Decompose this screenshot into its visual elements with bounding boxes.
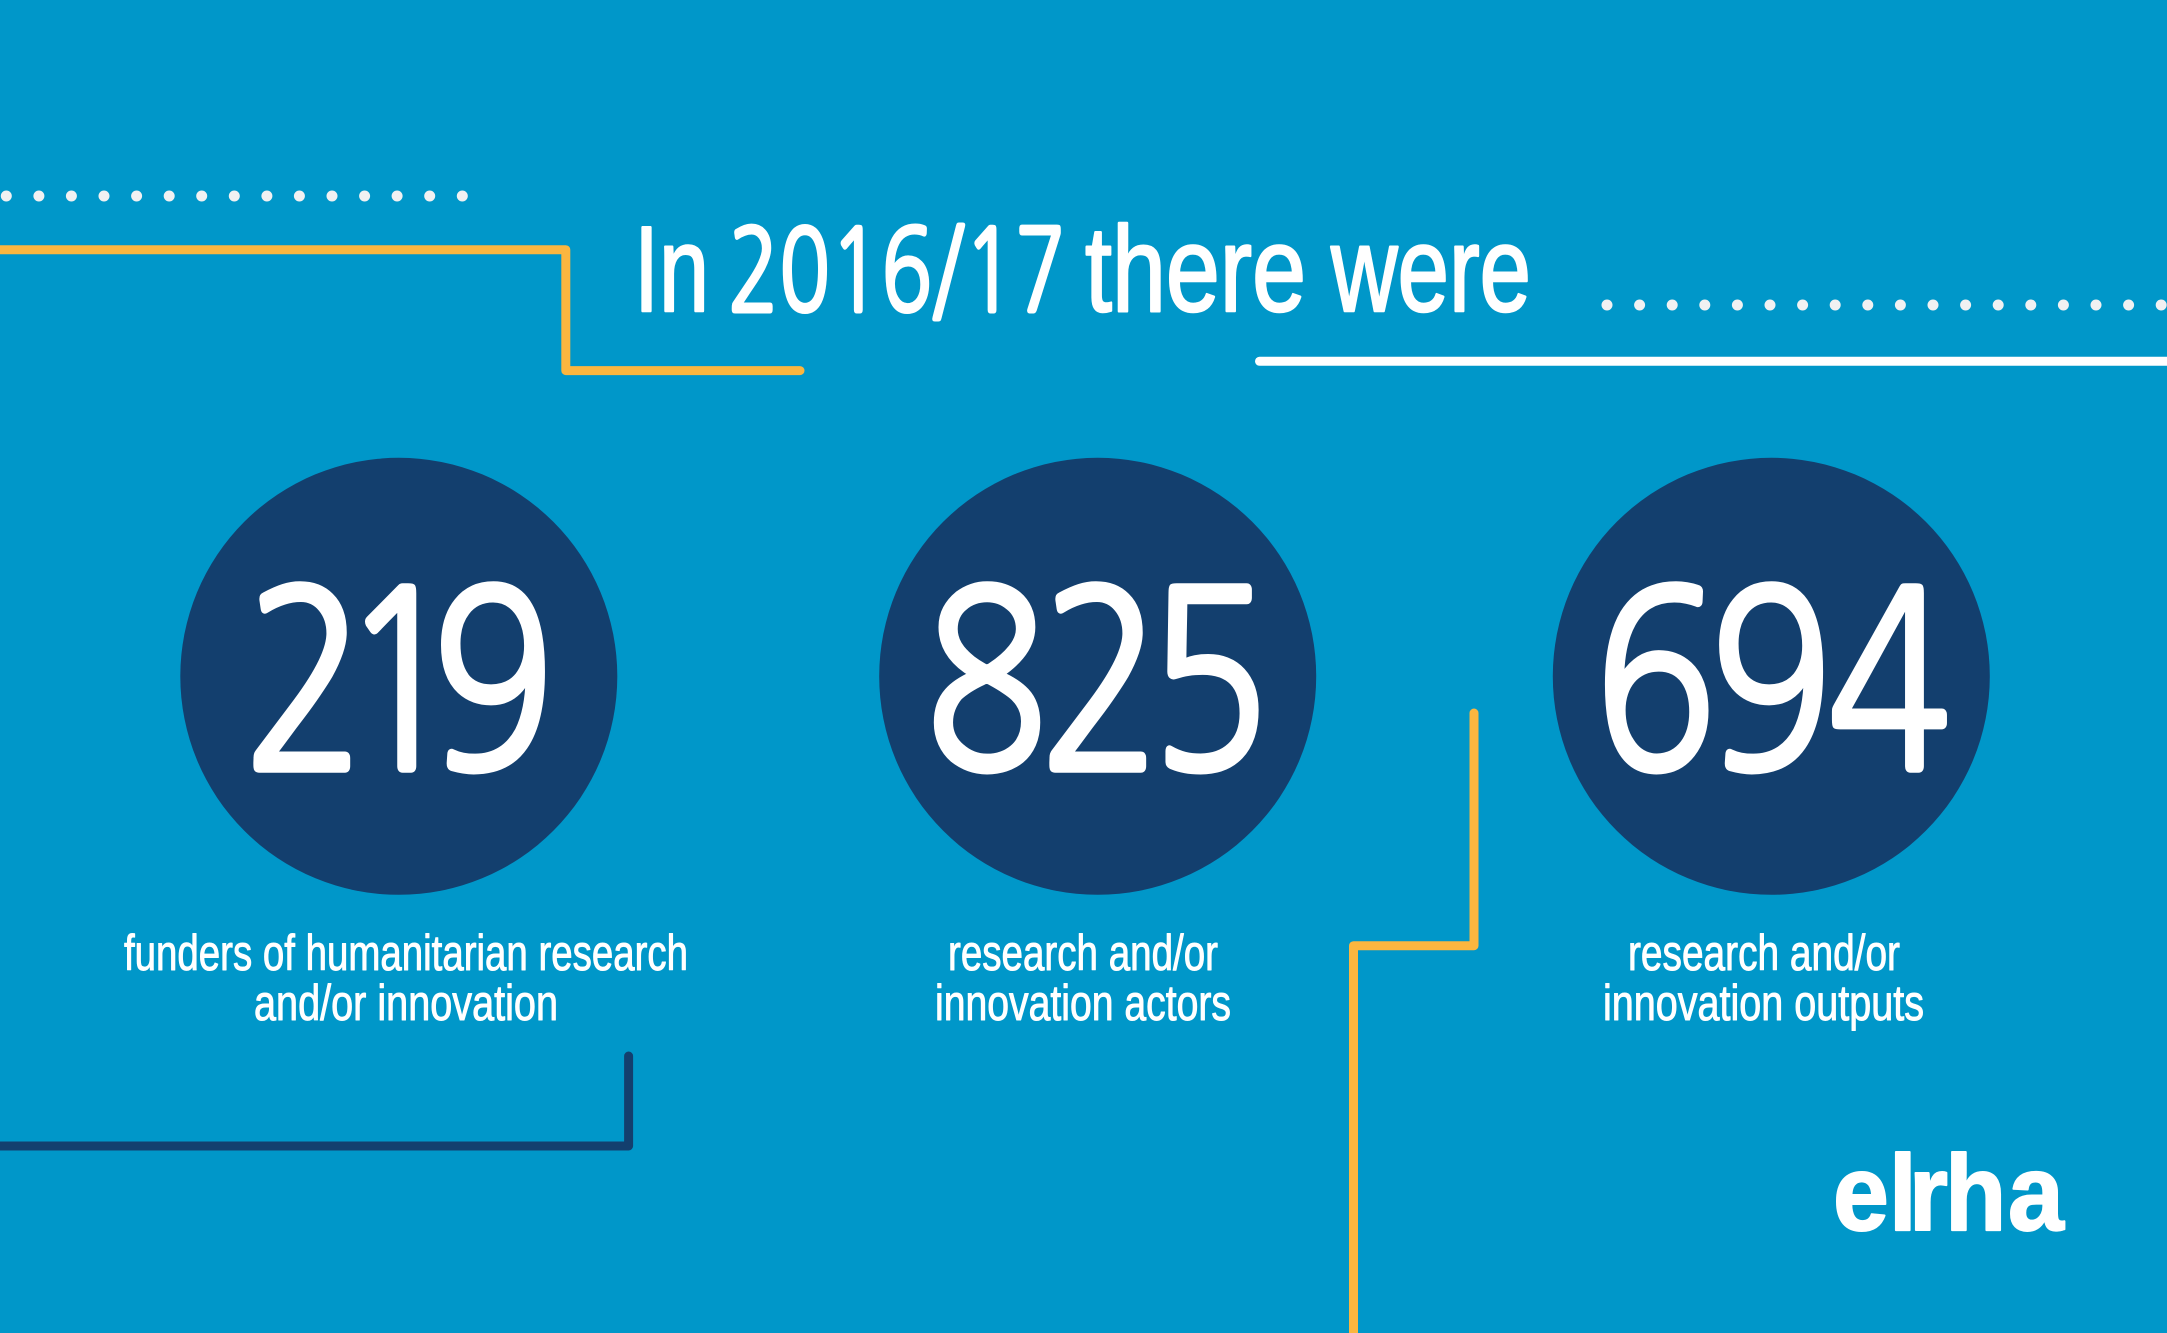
label: outputs: research and/or: [1628, 925, 1900, 981]
dotted line: top right: [1602, 300, 2167, 310]
number: 694: 694: [1594, 559, 1951, 805]
circle: funders: [180, 458, 617, 895]
label: funders: and/or innovation: [254, 975, 558, 1031]
dotted line: top left: [1, 190, 468, 202]
white line: top right: [1260, 357, 2167, 366]
yellow stepped line: top left: [0, 250, 800, 371]
label: outputs: innovation outputs: [1603, 975, 1924, 1031]
label: actors: research and/or: [948, 925, 1218, 981]
title: there: [1085, 201, 1306, 337]
title: 2016/17: [728, 214, 1066, 328]
label: actors: [935, 925, 1231, 1031]
label: funders: funders of humanitarian research: [124, 925, 688, 981]
title: In: [634, 201, 709, 337]
number: 219: 219: [243, 559, 555, 805]
circle: outputs: [1553, 458, 1990, 895]
navy bracket line: bottom left: [0, 1056, 629, 1146]
label: actors: innovation actors: [935, 975, 1231, 1031]
yellow stepped line: bottom centre: [1354, 713, 1474, 1333]
title: were: [1330, 201, 1531, 337]
number: 825: 825: [924, 559, 1271, 805]
circle: actors: [879, 458, 1316, 895]
logo: elrha: elrha: [1833, 1134, 2065, 1254]
panel: funders: [124, 458, 688, 1031]
label: funders: [124, 925, 688, 1031]
title: [634, 201, 1531, 337]
panel: actors: [879, 458, 1316, 1031]
label: outputs: [1603, 925, 1924, 1031]
panel: outputs: [1553, 458, 1990, 1031]
